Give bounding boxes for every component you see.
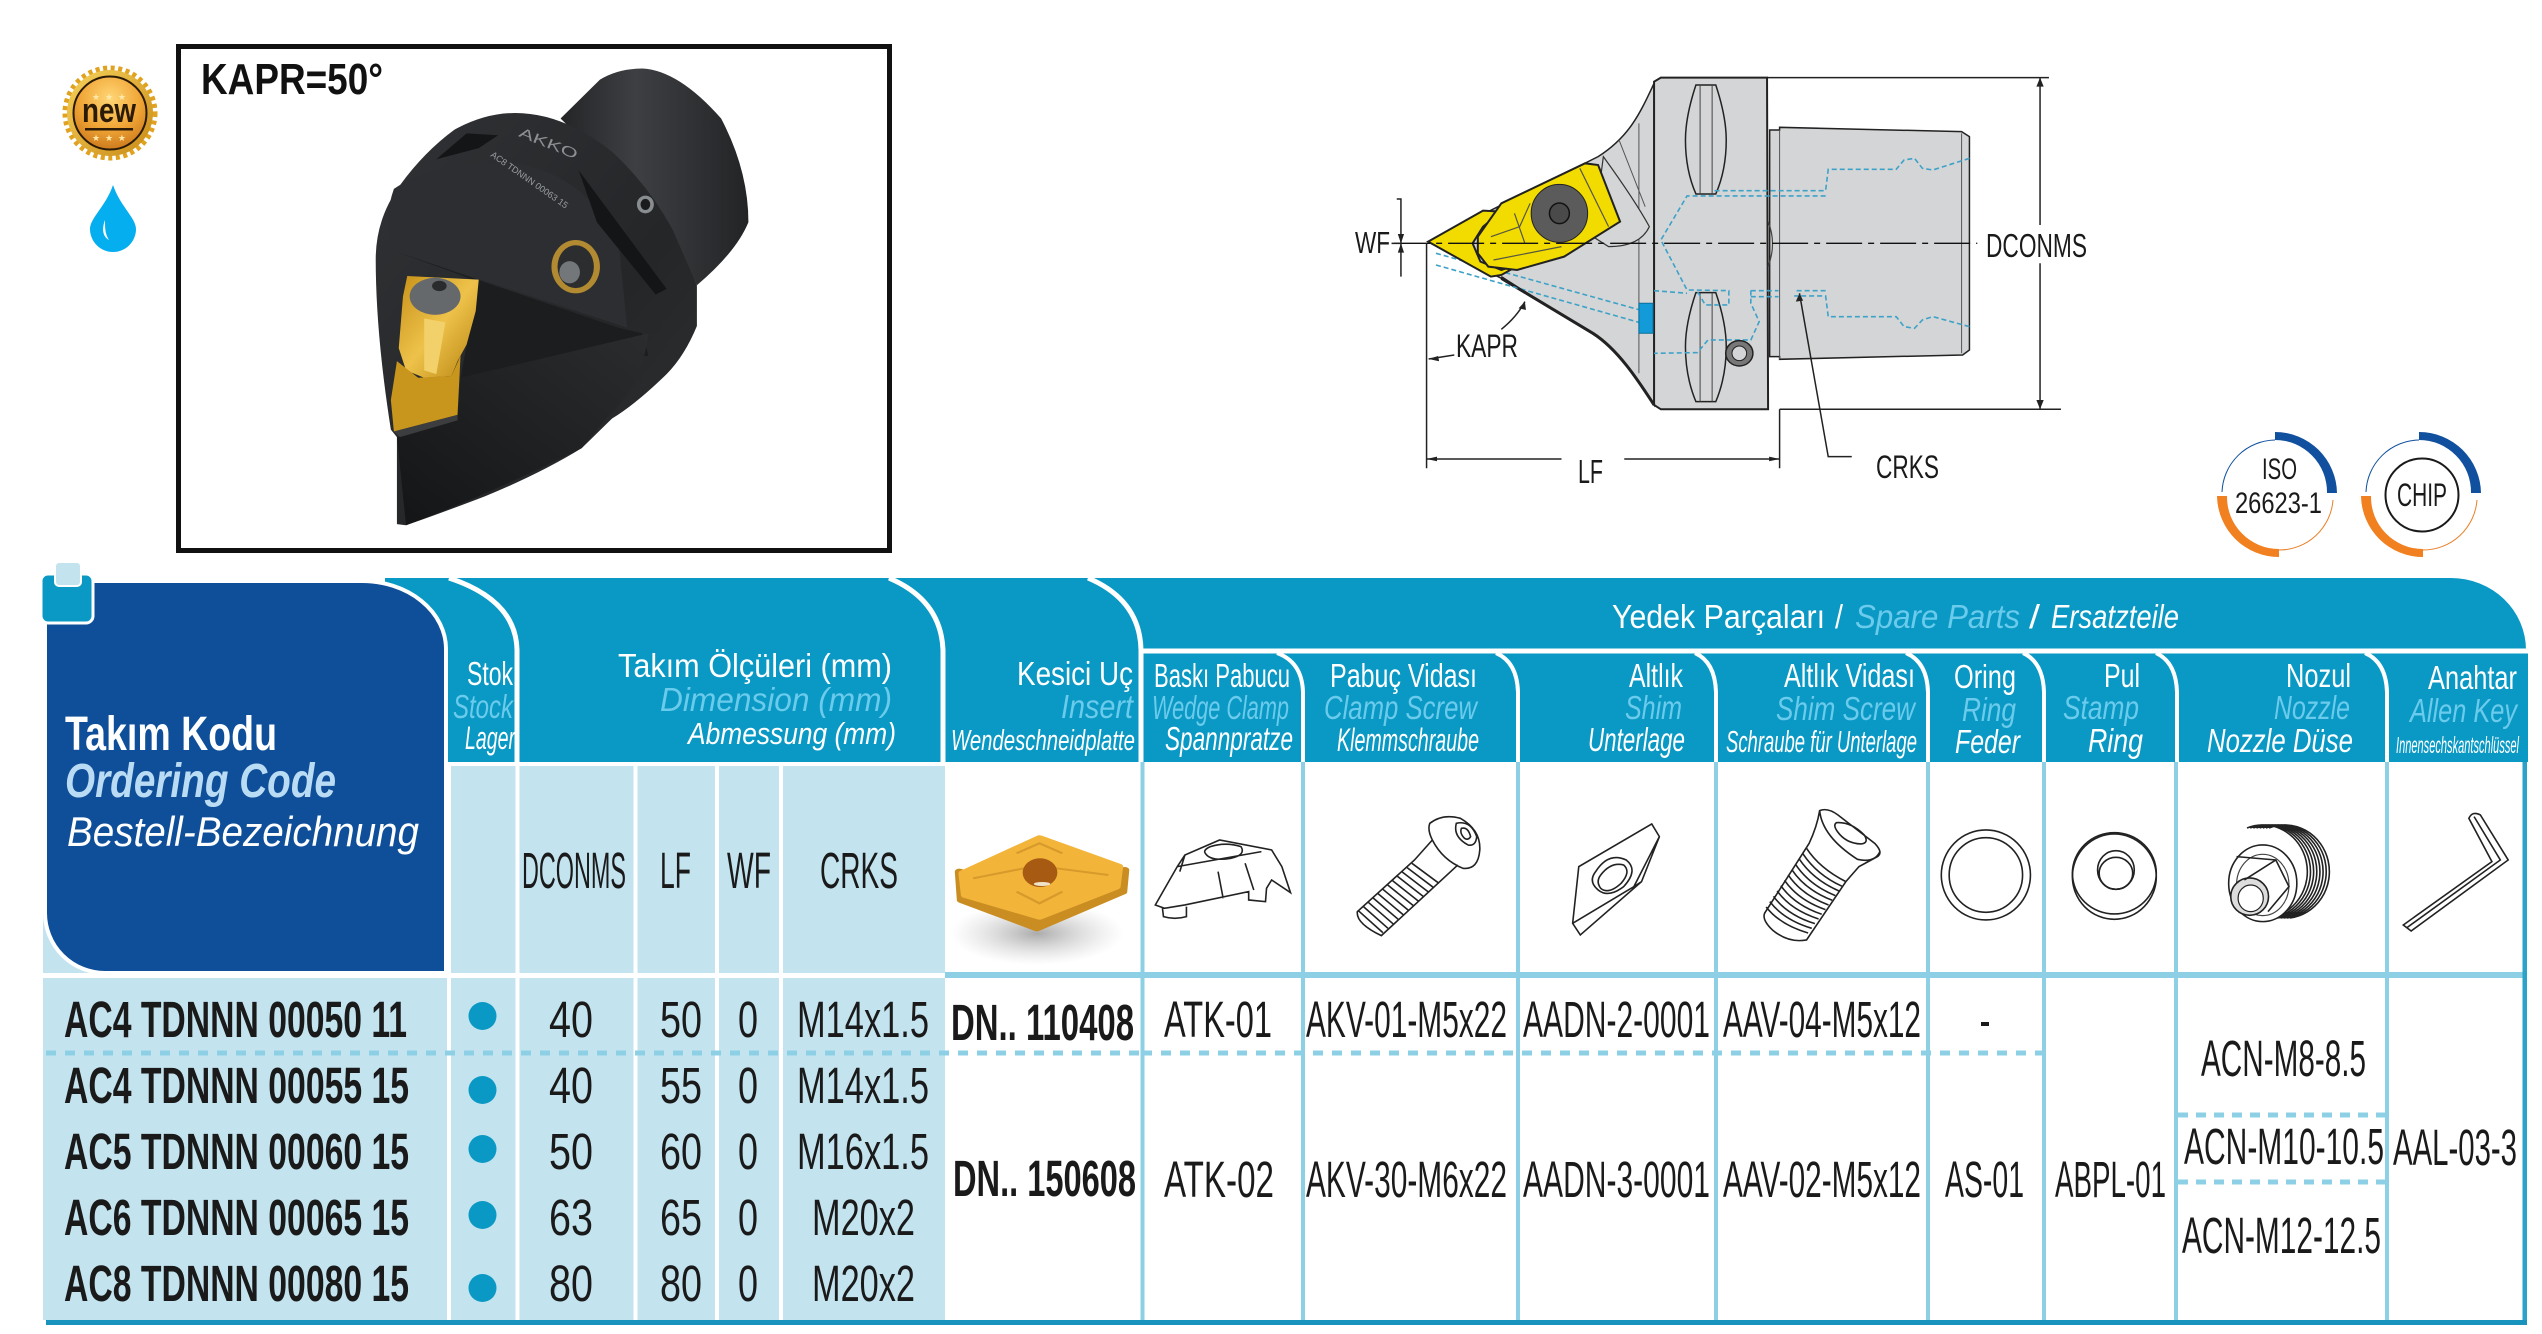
row: AC5 TDNNN 00060 15 xyxy=(64,1123,929,1180)
icon: o-ring xyxy=(1941,830,2030,920)
engraved brand: AKKO xyxy=(517,124,581,162)
row: AC6 TDNNN 00065 15: AC6 TDNNN 00065 15 xyxy=(64,1189,409,1246)
header: dimensions: Takım Ölçüleri (mm) xyxy=(618,647,892,684)
row: AC4 TDNNN 00050 11: 50 xyxy=(660,991,702,1048)
badge: CHIP xyxy=(2361,432,2481,557)
header: shim screw: Schraube für Unterlage xyxy=(1726,724,1917,759)
spare parts: second insert group: ATK-02 xyxy=(1164,1151,1274,1208)
row: AC4 TDNNN 00055 15: M14x1.5 xyxy=(797,1057,929,1114)
row: AC8 TDNNN 00080 15: 80 xyxy=(549,1255,593,1312)
spare parts: second insert group: AKV-30-M6x22 xyxy=(1306,1151,1507,1208)
technical drawing xyxy=(1355,78,2087,490)
panel: ordering code: Ordering Code xyxy=(65,755,336,808)
header: ring: Oring xyxy=(1954,658,2016,695)
nozzle codes: ACN-M10-10.5 xyxy=(2184,1118,2384,1175)
header: spare parts band xyxy=(1612,598,2179,635)
panel: ordering code: Bestell-Bezeichnung xyxy=(67,808,419,855)
header: spare parts band: / xyxy=(1835,598,1844,635)
icon: insert xyxy=(950,838,1125,965)
nozzle codes xyxy=(2182,1030,2384,1264)
header: dimensions: Abmessung (mm) xyxy=(686,716,896,751)
spare parts: first insert group xyxy=(951,991,1989,1051)
header: ring: Feder xyxy=(1955,723,2022,760)
spare parts: second insert group: DN.. 150608 xyxy=(953,1150,1136,1207)
panel: ordering code: Takım Kodu xyxy=(65,708,277,761)
header: nozzle: Nozzle Düse xyxy=(2207,722,2353,759)
icon: coolant drop xyxy=(90,185,136,252)
dimension column headers: CRKS xyxy=(820,842,898,899)
icon: table tab marker xyxy=(41,562,93,623)
nozzle codes: ACN-M12-12.5 xyxy=(2182,1207,2381,1264)
spare parts: first insert group: DN.. 110408 xyxy=(951,994,1134,1051)
header: insert: Insert xyxy=(1061,688,1135,725)
spare parts: second insert group: ABPL-01 xyxy=(2055,1151,2166,1208)
header: insert: Wendeschneidplatte xyxy=(951,725,1135,757)
header: nozzle: Nozzle xyxy=(2274,689,2350,726)
panel: ordering code xyxy=(45,581,446,973)
icon: allen key xyxy=(2403,813,2508,931)
row: AC4 TDNNN 00050 11 xyxy=(64,991,929,1048)
header: stock xyxy=(453,655,516,756)
icon: new badge: ★★★ xyxy=(92,133,126,143)
row: AC4 TDNNN 00055 15: 0 xyxy=(738,1057,758,1114)
header: clamp screw: Pabuç Vidası xyxy=(1330,657,1477,694)
header: shim screw: Altlık Vidası xyxy=(1784,657,1915,694)
row: AC4 TDNNN 00055 15: AC4 TDNNN 00055 15 xyxy=(64,1057,409,1114)
product table xyxy=(41,562,2528,1325)
row: AC6 TDNNN 00065 15 xyxy=(64,1189,915,1246)
header: stamp: Stamp xyxy=(2063,689,2139,726)
badge: CHIP: CHIP xyxy=(2397,477,2447,513)
row: AC4 TDNNN 00055 15: 40 xyxy=(549,1057,593,1114)
spare parts: first insert group: ATK-01 xyxy=(1164,991,1272,1048)
header: dimensions xyxy=(618,647,896,751)
header: stock: Stock xyxy=(453,688,514,725)
header: clamp screw: Klemmschraube xyxy=(1337,722,1479,758)
icon: washer xyxy=(2072,833,2156,919)
header: allen key xyxy=(2396,659,2519,758)
icon: shim xyxy=(1573,824,1659,935)
header: stamp xyxy=(2063,657,2144,759)
icon: nozzle xyxy=(2229,825,2329,922)
row: AC5 TDNNN 00060 15: 0 xyxy=(738,1123,758,1180)
icon: new badge xyxy=(66,68,154,158)
icon: wedge clamp xyxy=(1155,840,1291,918)
row: AC8 TDNNN 00080 15 xyxy=(64,1255,915,1312)
row: AC6 TDNNN 00065 15: M20x2 xyxy=(812,1189,915,1246)
dimension column headers xyxy=(522,842,898,899)
header: ring: Ring xyxy=(1962,691,2017,728)
header: ring xyxy=(1954,658,2022,760)
row: AC8 TDNNN 00080 15: AC8 TDNNN 00080 15 xyxy=(64,1255,409,1312)
header: insert: Kesici Uç xyxy=(1017,655,1133,692)
header band xyxy=(385,578,2528,762)
header: wedge clamp xyxy=(1152,657,1293,757)
row: AC5 TDNNN 00060 15: 60 xyxy=(660,1123,702,1180)
header: spare parts band: Ersatzteile xyxy=(2051,598,2179,635)
header: allen key: Anahtar xyxy=(2428,659,2517,696)
header: insert xyxy=(951,655,1135,757)
icon: new badge: ★★★ xyxy=(92,92,126,102)
spare parts: first insert group: AKV-01-M5x22 xyxy=(1306,991,1507,1048)
dimension column headers: DCONMS xyxy=(522,842,626,899)
nozzle codes: ACN-M8-8.5 xyxy=(2201,1030,2366,1087)
header: stamp: Ring xyxy=(2088,722,2144,759)
row: AC6 TDNNN 00065 15: 65 xyxy=(660,1189,702,1246)
icon: shim screw xyxy=(1764,810,1880,941)
label: LF: LF xyxy=(1578,453,1603,490)
header: spare parts band: Spare Parts xyxy=(1855,598,2020,635)
header: shim: Altlık xyxy=(1629,657,1683,694)
photo frame: tool holder xyxy=(178,46,890,550)
header: spare parts band: Yedek Parçaları xyxy=(1612,598,1825,635)
spare parts: second insert group: AS-01 xyxy=(1945,1151,2024,1208)
header: wedge clamp: Spannpratze xyxy=(1165,720,1293,757)
badge: ISO 26623-1: 26623-1 xyxy=(2235,487,2322,520)
row: AC5 TDNNN 00060 15: AC5 TDNNN 00060 15 xyxy=(64,1123,409,1180)
spare parts: first insert group: AADN-2-0001 xyxy=(1523,991,1710,1048)
header: nozzle xyxy=(2207,657,2353,759)
row: AC6 TDNNN 00065 15: 0 xyxy=(738,1189,758,1246)
header: dimensions: Dimension (mm) xyxy=(660,681,892,718)
icon: new badge: new xyxy=(82,92,136,130)
row: AC4 TDNNN 00050 11: 0 xyxy=(738,991,758,1048)
icon: clamp screw xyxy=(1357,817,1480,936)
row: AC5 TDNNN 00060 15: 50 xyxy=(549,1123,593,1180)
label: approach angle: KAPR=50° xyxy=(201,55,383,104)
table body backgrounds xyxy=(43,762,2527,1325)
spare parts: second insert group: AAV-02-M5x12 xyxy=(1723,1151,1921,1208)
header: stamp: Pul xyxy=(2104,657,2140,694)
header: stock: Lager xyxy=(465,720,516,756)
header: shim xyxy=(1588,657,1685,758)
header: nozzle: Nozul xyxy=(2286,657,2351,694)
header: shim screw xyxy=(1726,657,1917,759)
header: shim: Shim xyxy=(1625,689,1682,726)
header: stock: Stok xyxy=(467,655,513,692)
header: wedge clamp: Baskı Pabucu xyxy=(1154,657,1290,694)
row: AC4 TDNNN 00050 11: M14x1.5 xyxy=(797,991,929,1048)
label: DCONMS: DCONMS xyxy=(1986,227,2087,264)
row: AC4 TDNNN 00050 11: AC4 TDNNN 00050 11 xyxy=(64,991,407,1048)
row: AC4 TDNNN 00050 11: 40 xyxy=(549,991,593,1048)
badge: ISO 26623-1: ISO xyxy=(2262,453,2297,486)
row: AC4 TDNNN 00055 15: 55 xyxy=(660,1057,702,1114)
label: CRKS: CRKS xyxy=(1876,449,1939,485)
badge: ISO 26623-1 xyxy=(2217,432,2337,557)
row: AC5 TDNNN 00060 15: M16x1.5 xyxy=(797,1123,929,1180)
engraved tool code: AC8 TDNNN 00063 15 xyxy=(489,149,570,210)
header: shim screw: Shim Screw xyxy=(1776,690,1917,727)
row: AC4 TDNNN 00055 15 xyxy=(64,1057,929,1114)
header: clamp screw xyxy=(1324,657,1479,758)
spare parts: second insert group: AADN-3-0001 xyxy=(1523,1151,1710,1208)
header: shim: Unterlage xyxy=(1588,721,1685,758)
label: KAPR: KAPR xyxy=(1456,328,1518,364)
dimension column headers: WF xyxy=(727,842,771,899)
header: spare parts band: / xyxy=(2029,598,2041,635)
tool holder render xyxy=(376,69,748,525)
row: AC8 TDNNN 00080 15: M20x2 xyxy=(812,1255,915,1312)
row: AC6 TDNNN 00065 15: 63 xyxy=(549,1189,593,1246)
row: AC8 TDNNN 00080 15: 80 xyxy=(660,1255,702,1312)
label: WF: WF xyxy=(1355,225,1390,260)
header: wedge clamp: Wedge Clamp xyxy=(1152,689,1289,726)
header: clamp screw: Clamp Screw xyxy=(1324,689,1479,726)
row: AC8 TDNNN 00080 15: 0 xyxy=(738,1255,758,1312)
spare parts: first insert group: AAV-04-M5x12 xyxy=(1723,991,1921,1048)
spare parts: second insert group xyxy=(953,1150,2166,1208)
dimension column headers: LF xyxy=(660,842,691,899)
